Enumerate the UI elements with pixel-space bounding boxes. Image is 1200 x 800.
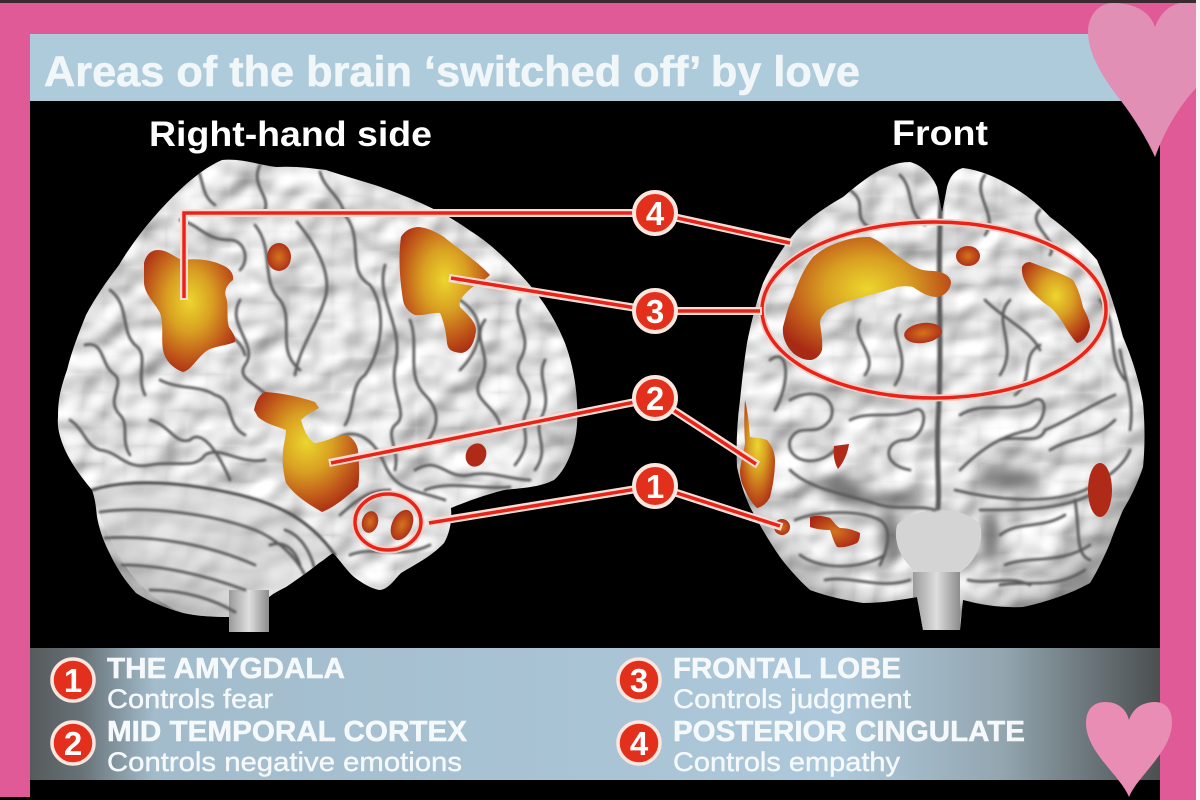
side cerebellum shading [92, 483, 335, 620]
callout ellipse: front frontal lobe [762, 222, 1106, 398]
activation: small top [956, 246, 980, 266]
heart: bottom right [1086, 702, 1172, 797]
activation: right frontal [1022, 262, 1090, 343]
activation: small spot [267, 243, 291, 271]
activation: amygdala spots [359, 506, 418, 544]
legend item 2: 2 [64, 725, 82, 762]
number badge 1: 1 [646, 468, 664, 505]
activation: centre [903, 320, 943, 346]
brain: right-hand side view [50, 150, 585, 640]
number badge 2 [634, 377, 676, 419]
number badge 3 [634, 290, 676, 332]
activation: posterior cingulate side [144, 250, 235, 372]
number badge 3: 3 [646, 293, 664, 330]
legend panel [30, 648, 1160, 780]
legend item 1: 1 [64, 662, 82, 699]
legend item 1 [52, 653, 345, 714]
leader lines [184, 213, 792, 527]
legend item 4: POSTERIOR CINGULATE [673, 716, 1025, 748]
right edge [1196, 0, 1200, 800]
activation: frontal large [783, 237, 951, 360]
legend item 4 [618, 716, 1025, 777]
number badge 4: 4 [646, 195, 665, 232]
legend item 1: THE AMYGDALA [107, 653, 345, 685]
legend item 2: MID TEMPORAL CORTEX [107, 716, 468, 748]
leader lines red core [184, 213, 790, 526]
brain: front view [730, 155, 1155, 635]
legend item 4: Controls empathy [673, 747, 901, 777]
activation: frontal lobe side [400, 227, 490, 353]
heading: front: Front [892, 114, 988, 153]
activation: right side spot [1088, 463, 1112, 517]
front brain surface [730, 155, 1155, 635]
number badge 4 [634, 192, 676, 234]
legend item 3: Controls judgment [673, 684, 912, 714]
side gyri folds [70, 165, 546, 612]
title bar [30, 34, 1122, 101]
legend item 2 [52, 716, 468, 777]
legend item 4: 4 [630, 725, 649, 762]
legend item 2: Controls negative emotions [107, 747, 462, 777]
legend item 3 [618, 653, 912, 714]
activation: temporal [740, 400, 775, 508]
activation: small right spot [462, 440, 490, 470]
side brainstem [229, 590, 269, 635]
activation: amygdala tiny [774, 519, 790, 535]
legend item 3: FRONTAL LOBE [673, 653, 901, 685]
pons [896, 510, 981, 573]
activation: amygdala front [810, 516, 860, 547]
dark shadows [818, 469, 1040, 560]
activation: mid temporal side [254, 392, 359, 512]
legend item 1: Controls fear [107, 684, 273, 714]
heading: right-hand side: Right-hand side [149, 115, 432, 154]
number badge 1 [634, 465, 676, 507]
heart: top right [1088, 3, 1196, 157]
legend item 3: 3 [630, 662, 648, 699]
activation: low left spot [834, 444, 849, 469]
side brain surface [50, 150, 585, 640]
title bar: Areas of the brain ‘switched off’ by love [44, 48, 860, 96]
top edge [0, 0, 1197, 3]
front brainstem [913, 572, 960, 632]
number badge 2: 2 [646, 380, 664, 417]
bottom edge [0, 797, 30, 800]
front gyri folds [770, 175, 1131, 585]
callout ellipse: side amygdala [355, 494, 421, 550]
